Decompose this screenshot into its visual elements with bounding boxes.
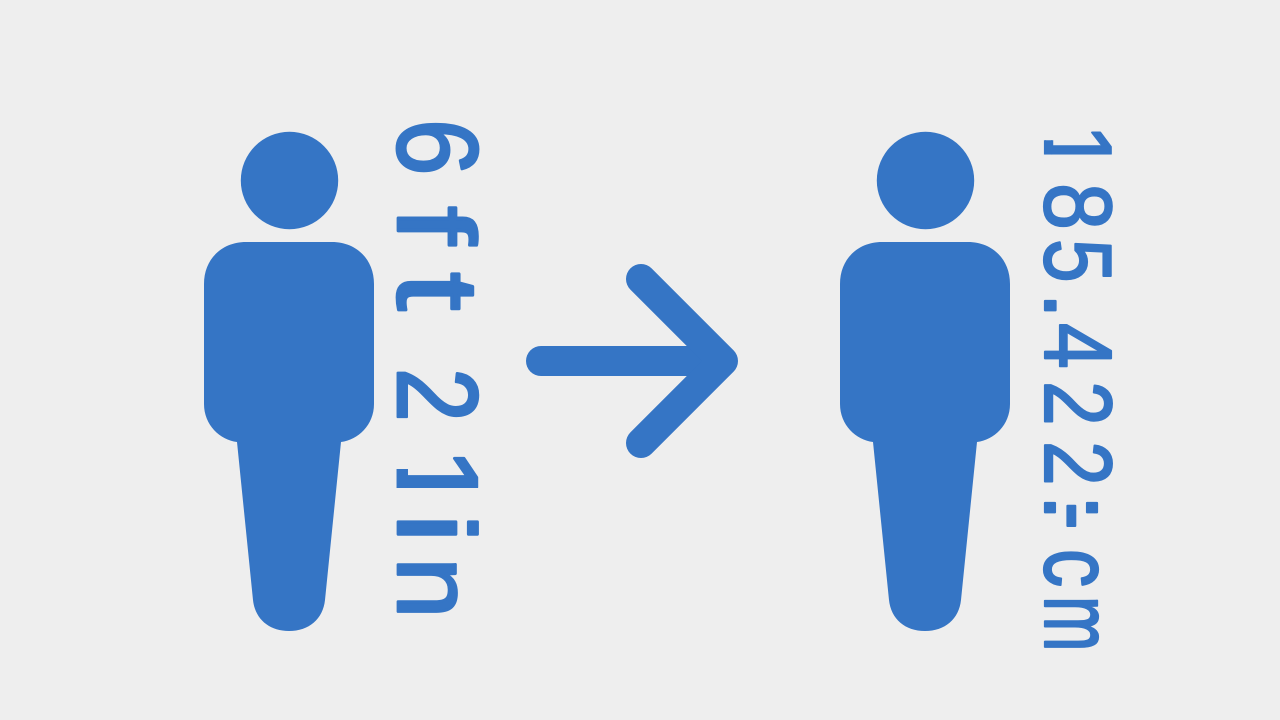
label: height in centimetres: 4: [1025, 323, 1132, 369]
label: height in feet and inches: [396, 122, 480, 613]
arrow: converts to: [541, 279, 723, 443]
label: height in centimetres: .: [1024, 292, 1134, 319]
label: height in centimetres: 1: [1024, 124, 1131, 173]
label: height in centimetres: -: [1023, 502, 1132, 530]
label: height in feet and inches: n: [374, 557, 495, 619]
label: height in centimetres: [1042, 132, 1113, 648]
infographic: height conversion: [204, 122, 1113, 648]
label: height in centimetres: 8: [1024, 183, 1131, 230]
icon: left person: [204, 132, 374, 631]
label: height in feet and inches: 2: [373, 368, 501, 422]
label: height in centimetres: :: [1024, 494, 1134, 521]
label: height in centimetres: c: [1024, 549, 1134, 587]
label: height in centimetres: m: [1024, 596, 1134, 652]
label: height in feet and inches: f: [374, 206, 497, 246]
label: height in feet and inches: i: [374, 513, 497, 543]
label: height in centimetres: 2: [1024, 441, 1132, 486]
label: height in centimetres: 5: [1024, 239, 1132, 283]
label: height in centimetres: 2: [1024, 381, 1132, 426]
label: height in feet and inches: 1: [373, 447, 501, 513]
label: height in feet and inches: 6: [374, 119, 502, 175]
icon: right person: [840, 132, 1010, 631]
label: height in feet and inches: t: [373, 272, 502, 311]
